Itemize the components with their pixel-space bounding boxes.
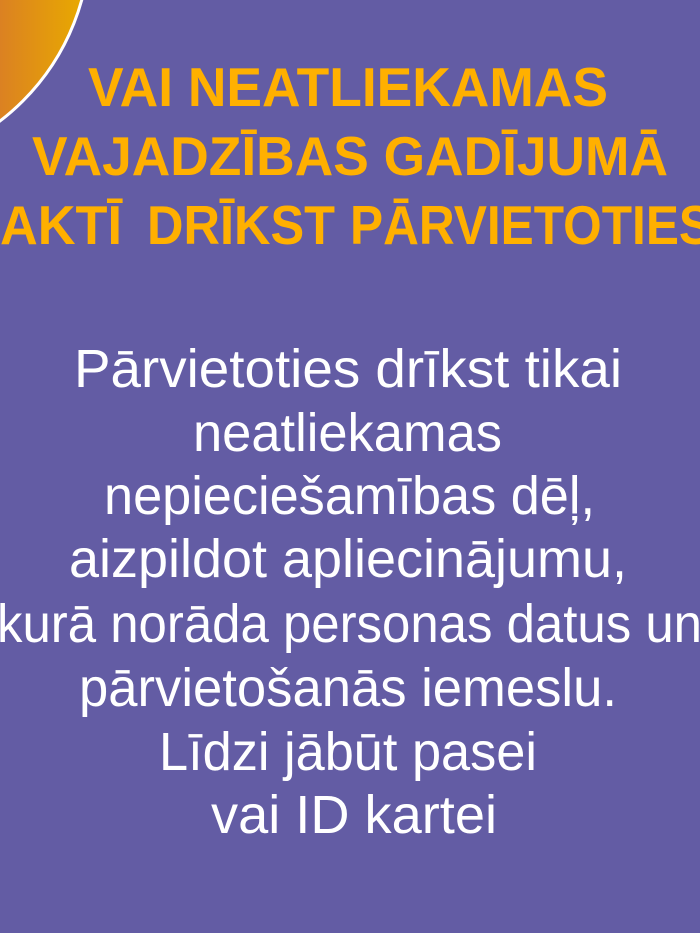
title: AKTĪ <box>0 194 123 256</box>
title: VAJADZĪBAS GADĪJUMĀ <box>32 125 668 187</box>
body text: Līdzi jābūt pasei <box>159 722 537 782</box>
body text: vai ID kartei <box>211 785 497 845</box>
title <box>0 56 700 256</box>
body text: aizpildot apliecinājumu, <box>69 529 627 589</box>
icon: orange corner circle <box>0 0 90 168</box>
body text <box>0 339 700 845</box>
body text: Pārvietoties drīkst tikai <box>74 339 622 399</box>
body text: pārvietošanās iemeslu. <box>79 658 617 718</box>
title: VAI NEATLIEKAMAS <box>88 56 608 118</box>
body text: neatliekamas <box>193 403 502 463</box>
title: DRĪKST <box>147 194 335 256</box>
body text: nepieciešamības dēļ, <box>104 466 595 526</box>
